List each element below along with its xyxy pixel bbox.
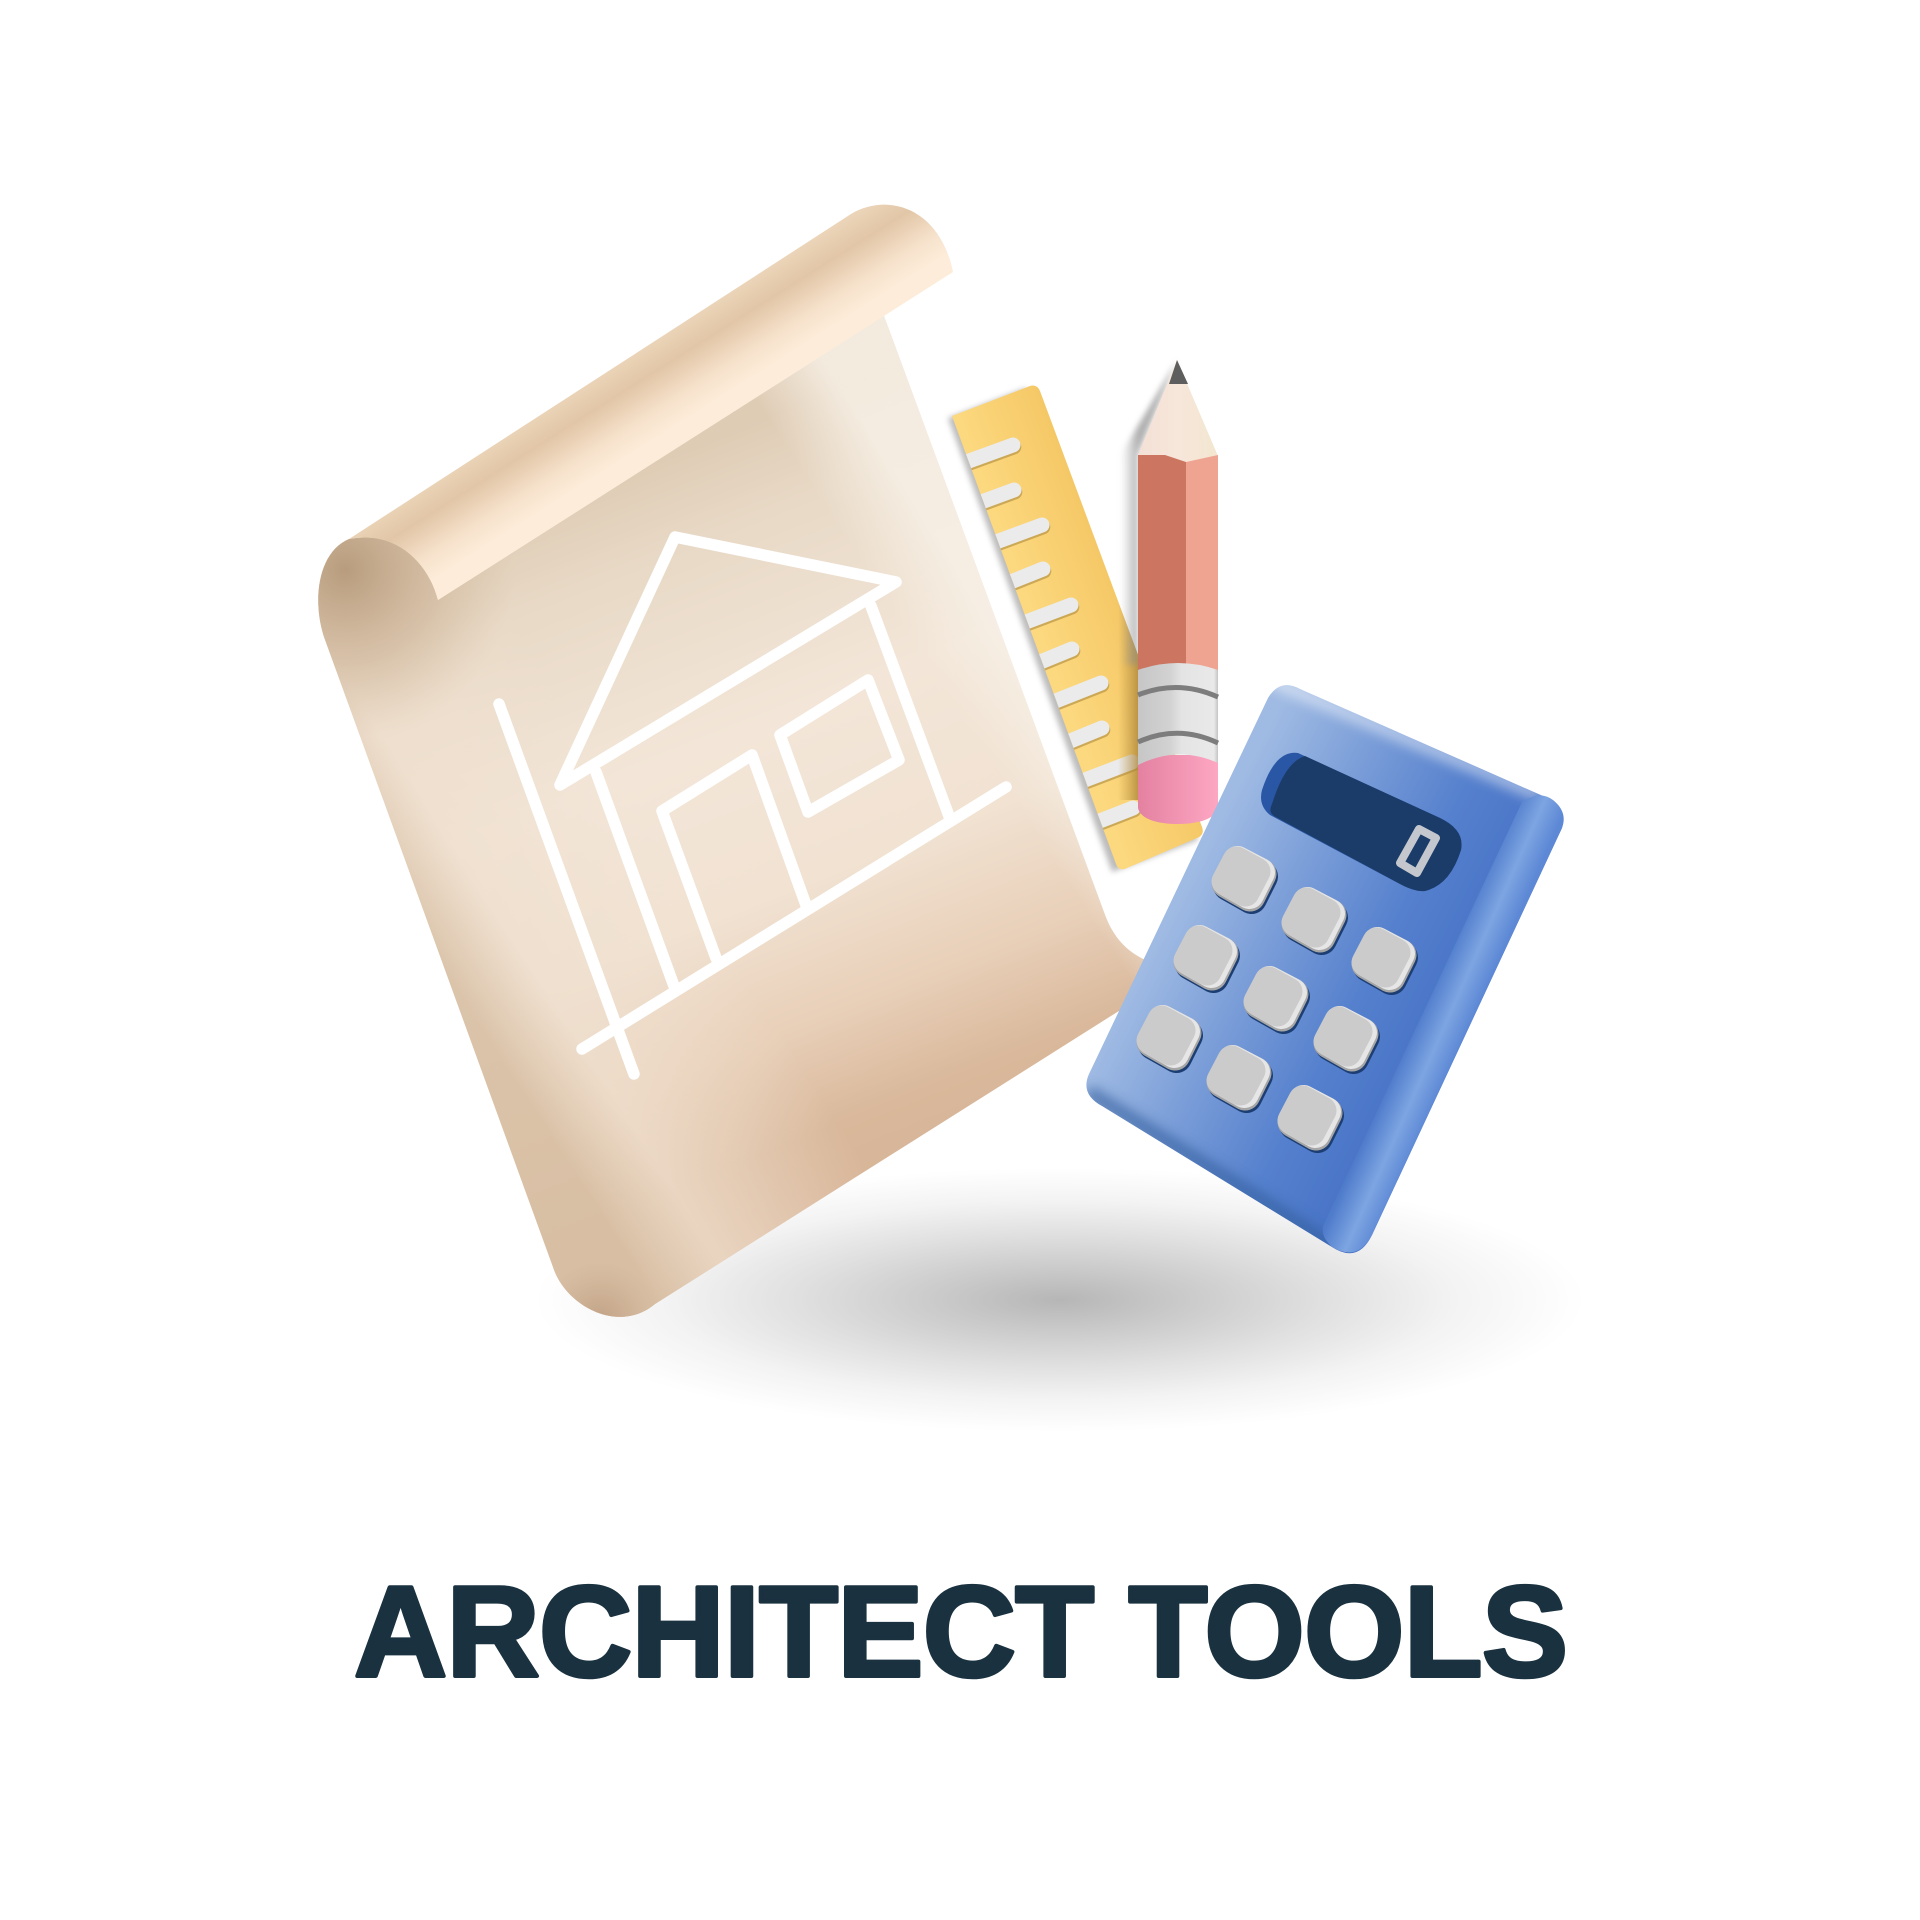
rolled top flap [349, 205, 953, 600]
calculator [1086, 680, 1564, 1253]
calculator keys [1150, 860, 1402, 1138]
ruler [948, 386, 1203, 872]
screen digit [1400, 829, 1436, 873]
ferrule bands [1138, 687, 1218, 743]
calculator edge shading [1088, 680, 1540, 1250]
pencil cast shadow [1121, 360, 1177, 665]
calculator body [1086, 685, 1563, 1253]
calculator screen [1261, 753, 1462, 891]
pencil lead [1169, 360, 1188, 384]
eraser [1138, 755, 1218, 824]
blueprint sheet [318, 204, 1144, 1317]
ruler edge shadow [948, 388, 1198, 872]
house drawing [499, 537, 1006, 1074]
ruler ticks [958, 445, 1138, 826]
sheet body [318, 316, 1144, 1317]
ruler body [952, 386, 1203, 869]
pencil barrel [1138, 455, 1186, 672]
illustration: architect tools [318, 204, 1565, 1680]
pencil [1121, 360, 1218, 824]
ferrule [1138, 663, 1218, 765]
title: ARCHITECT TOOLS [354, 1560, 1568, 1704]
calculator spine [1323, 795, 1564, 1252]
pencil wood tip [1138, 360, 1218, 462]
ground shadow [535, 1168, 1585, 1432]
